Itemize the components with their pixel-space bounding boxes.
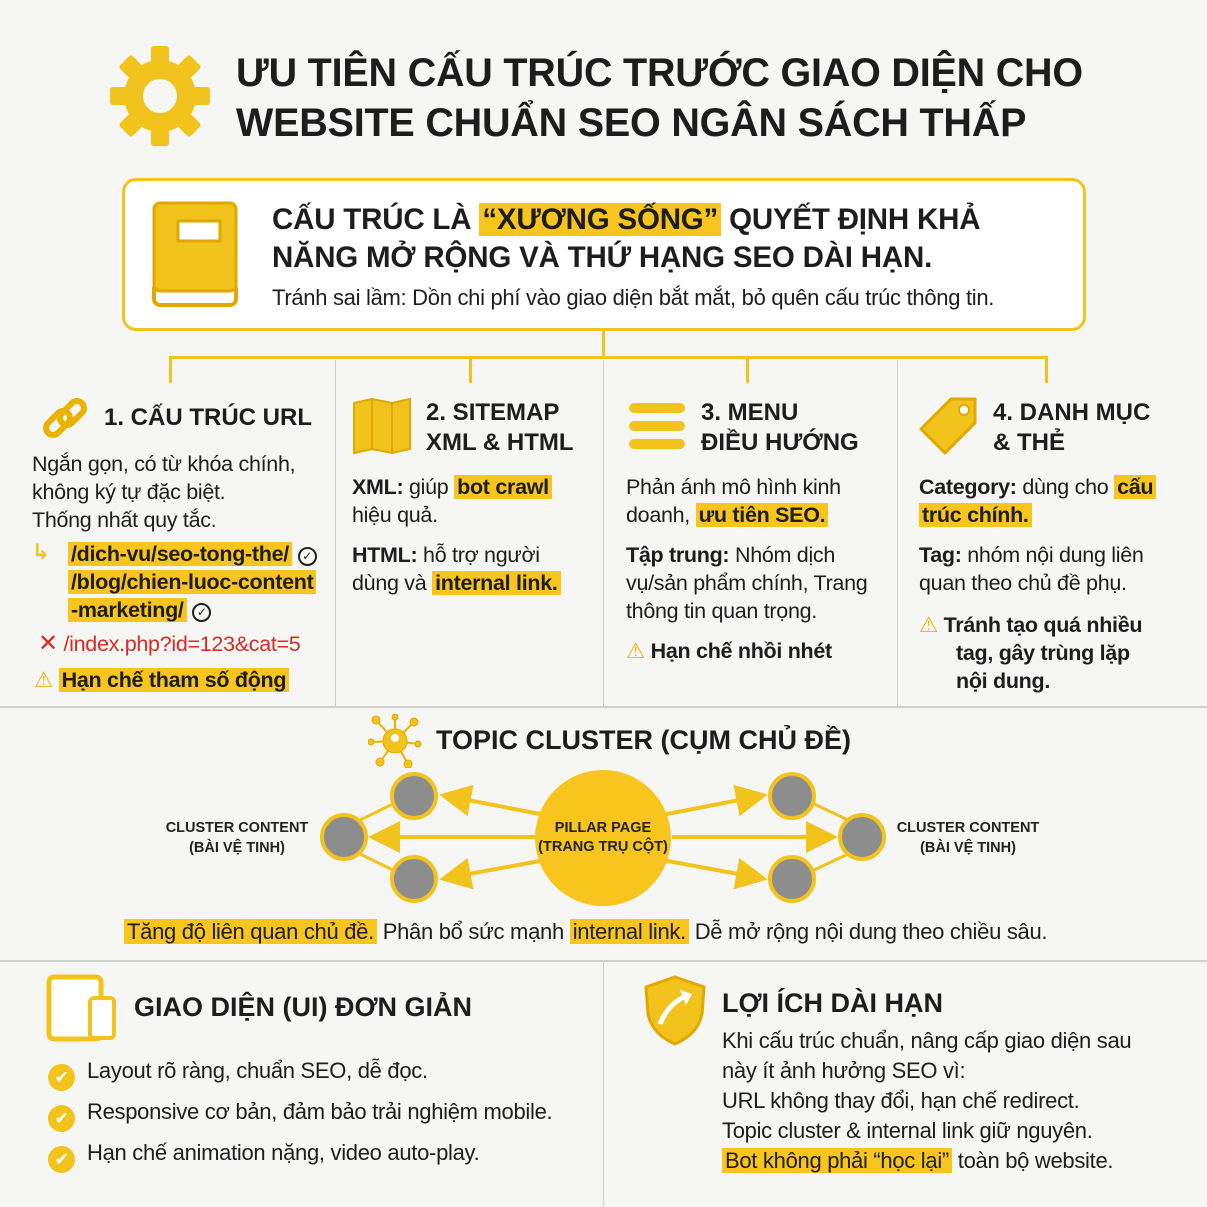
panel: simple UI bbox=[46, 974, 552, 1173]
panel: sitemap: HTML: hỗ trợ người bbox=[352, 543, 540, 567]
good URLs bbox=[32, 540, 317, 622]
text: Topic cluster & internal link giữ nguyên. bbox=[722, 1118, 1093, 1143]
checklist: ✔ bbox=[55, 1068, 68, 1087]
text: Khi cấu trúc chuẩn, nâng cấp giao diện sau bbox=[722, 1028, 1131, 1053]
warning: ⚠ Tránh tạo quá nhiều bbox=[919, 613, 1142, 637]
text: không ký tự đặc biệt. bbox=[32, 480, 225, 504]
warning: ⚠ Hạn chế nhồi nhét bbox=[626, 639, 832, 663]
good URLs: ✓ bbox=[302, 549, 312, 563]
heading: GIAO DIỆN (UI) ĐƠN GIẢN bbox=[134, 992, 472, 1022]
heading: 4. DANH MỤC bbox=[993, 399, 1150, 426]
good URLs: /blog/chien-luoc-content bbox=[71, 570, 313, 594]
text: Bot không phải “học lại” toàn bộ website. bbox=[725, 1148, 1113, 1173]
text: Phản ánh mô hình kinh bbox=[626, 475, 841, 499]
icon: network bbox=[368, 714, 422, 768]
panel: categories: quan theo chủ đề phụ. bbox=[919, 571, 1127, 595]
good URLs: /dich-vu/seo-tong-the/ bbox=[71, 542, 289, 566]
panel: key message bbox=[122, 178, 1086, 331]
text bbox=[626, 475, 841, 527]
checklist: ✔ bbox=[55, 1150, 68, 1169]
title: WEBSITE CHUẨN SEO NGÂN SÁCH THẤP bbox=[236, 101, 1026, 145]
text: hiệu quả. bbox=[352, 503, 438, 527]
icon: map bbox=[353, 398, 411, 454]
panel: categories bbox=[919, 398, 1156, 693]
text: Thống nhất quy tắc. bbox=[32, 508, 216, 532]
panel: menu: vụ/sản phẩm chính, Trang bbox=[626, 571, 867, 595]
text: trúc chính. bbox=[922, 503, 1029, 527]
icon: shield bbox=[644, 975, 706, 1046]
panel: URL structure bbox=[32, 398, 317, 692]
panel: long-term benefits bbox=[644, 975, 1131, 1173]
warning: tag, gây trùng lặp bbox=[956, 641, 1130, 665]
heading bbox=[701, 399, 859, 456]
diagram: (TRANG TRỤ CỘT) bbox=[538, 837, 668, 855]
warning: nội dung. bbox=[956, 669, 1050, 693]
heading bbox=[426, 399, 574, 456]
heading: & THẺ bbox=[993, 429, 1065, 456]
heading bbox=[993, 399, 1150, 456]
text: doanh, ưu tiên SEO. bbox=[626, 503, 825, 527]
text: URL không thay đổi, hạn chế redirect. bbox=[722, 1088, 1079, 1113]
subtext: Tránh sai lầm: Dồn chi phí vào giao diện bắt mắt, bỏ quên cấu trúc thông tin. bbox=[272, 285, 994, 310]
text: Ngắn gọn, có từ khóa chính, bbox=[32, 452, 295, 476]
heading: TOPIC CLUSTER (CỤM CHỦ ĐỀ) bbox=[436, 725, 851, 755]
diagram: (BÀI VỆ TINH) bbox=[189, 838, 285, 856]
diagram: CLUSTER CONTENT bbox=[897, 820, 1039, 836]
heading: key message: CẤU TRÚC LÀ “XƯƠNG SỐNG” QUYẾT ĐỊNH KHẢ bbox=[272, 203, 980, 236]
good URLs: -marketing/ bbox=[71, 598, 184, 622]
heading: key message bbox=[272, 202, 980, 274]
title bbox=[236, 50, 1083, 145]
panel: sitemap bbox=[352, 398, 574, 595]
icon: gear bbox=[110, 46, 210, 146]
text bbox=[32, 452, 295, 532]
heading: 2. SITEMAP bbox=[426, 399, 559, 426]
diagram: (BÀI VỆ TINH) bbox=[920, 838, 1016, 856]
good URLs: ✓ bbox=[197, 605, 207, 619]
checklist: ✔ bbox=[55, 1109, 68, 1128]
icon: chain link bbox=[43, 398, 87, 438]
heading: LỢI ÍCH DÀI HẠN bbox=[722, 988, 943, 1018]
diagram: PILLAR PAGE bbox=[555, 820, 652, 836]
warning bbox=[919, 613, 1142, 693]
text bbox=[919, 475, 1156, 527]
heading: key message: NĂNG MỞ RỘNG VÀ THỨ HẠNG SEO DÀI HẠN. bbox=[272, 241, 932, 274]
panel: sitemap: dùng và internal link. bbox=[352, 571, 558, 595]
icon: devices bbox=[46, 974, 116, 1042]
panel: categories: Tag: nhóm nội dung liên bbox=[919, 543, 1144, 567]
text: Category: dùng cho cấu bbox=[919, 475, 1153, 499]
diagram bbox=[166, 770, 1040, 906]
heading: ĐIỀU HƯỚNG bbox=[701, 429, 859, 456]
bad URL: ✕ /index.php?id=123&cat=5 bbox=[38, 630, 300, 657]
icon: book bbox=[152, 202, 238, 307]
title: ƯU TIÊN CẤU TRÚC TRƯỚC GIAO DIỆN CHO bbox=[236, 51, 1083, 95]
icon: menu bars bbox=[629, 403, 685, 449]
heading: 3. MENU bbox=[701, 399, 798, 426]
icon: tag bbox=[919, 398, 976, 455]
text bbox=[352, 475, 552, 527]
heading: 1. CẤU TRÚC URL bbox=[104, 404, 312, 431]
diagram: CLUSTER CONTENT bbox=[166, 820, 308, 836]
checklist: Layout rõ ràng, chuẩn SEO, dễ đọc. bbox=[87, 1058, 428, 1083]
text: này ít ảnh hưởng SEO vì: bbox=[722, 1058, 965, 1083]
warning: ⚠ Hạn chế tham số động bbox=[34, 668, 286, 692]
checklist: Hạn chế animation nặng, video auto-play. bbox=[87, 1140, 479, 1165]
caption: Tăng độ liên quan chủ đề. Phân bổ sức mạnh internal link. Dễ mở rộng nội dung theo chiều sâu. bbox=[127, 919, 1047, 944]
text: XML: giúp bot crawl bbox=[352, 475, 549, 499]
heading: XML & HTML bbox=[426, 429, 574, 456]
panel: menu: Tập trung: Nhóm dịch bbox=[626, 543, 835, 567]
section: topic cluster bbox=[124, 714, 1047, 944]
panel: menu: thông tin quan trọng. bbox=[626, 599, 817, 623]
text bbox=[722, 1028, 1131, 1173]
good URLs: ↳ bbox=[32, 540, 50, 564]
checklist: Responsive cơ bản, đảm bảo trải nghiệm mobile. bbox=[87, 1099, 552, 1124]
panel: menu bbox=[626, 399, 867, 663]
connector lines bbox=[169, 331, 1048, 383]
checklist bbox=[48, 1058, 552, 1173]
